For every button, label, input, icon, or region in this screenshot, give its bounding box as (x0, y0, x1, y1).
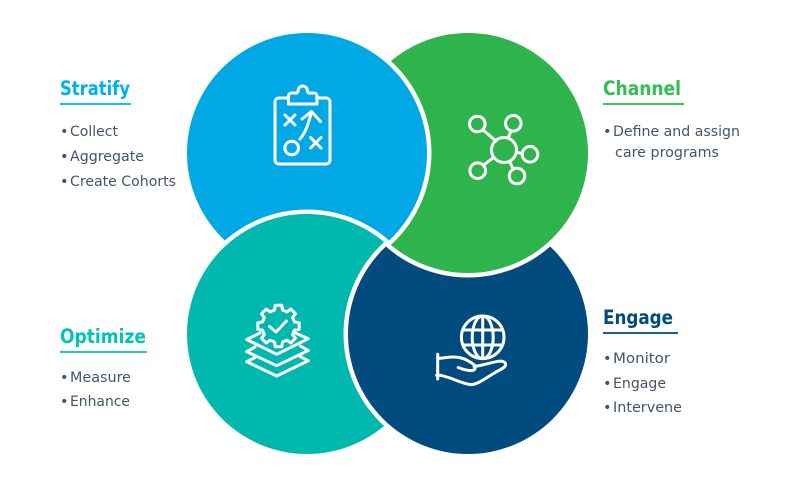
list: Stratify: • (60, 149, 69, 165)
panel: Engage (603, 306, 682, 416)
underline: Optimize (60, 351, 147, 353)
icon: network hub (470, 116, 538, 184)
list: Channel: • (603, 124, 612, 140)
list: Engage: • (603, 351, 612, 367)
list: Stratify: Collect (70, 124, 118, 140)
list: Stratify: Create Cohorts (70, 174, 176, 190)
heading: Optimize: Optimize (60, 325, 146, 348)
green circle (390, 33, 588, 273)
icon: gear and layers (247, 305, 308, 376)
heading: Channel: Channel (603, 77, 681, 100)
underline: Stratify (60, 103, 131, 105)
list: Engage: Intervene (613, 400, 682, 416)
list: Optimize: • (60, 394, 69, 410)
blue circle (187, 33, 427, 240)
panel: Stratify (60, 77, 176, 190)
underline: Channel (603, 103, 684, 105)
list: Engage: Monitor (613, 351, 670, 367)
icon: hand holding globe (437, 316, 506, 385)
icon: clipboard with play diagram (275, 86, 330, 164)
heading: Engage: Engage (603, 306, 673, 329)
list: Optimize: Enhance (70, 394, 130, 410)
panel: Optimize (60, 325, 147, 410)
navy circle (348, 246, 588, 454)
heading: Stratify: Stratify (60, 77, 130, 100)
list: Channel: Define and assign (613, 124, 740, 140)
list: Channel: care programs (615, 145, 719, 161)
teal circle (187, 214, 384, 454)
list: Optimize: • (60, 370, 69, 386)
list: Engage: • (603, 400, 612, 416)
list: Engage: • (603, 376, 612, 392)
list: Stratify: Aggregate (70, 149, 144, 165)
list: Stratify: • (60, 174, 69, 190)
list: Engage: Engage (613, 376, 666, 392)
panel: Channel (603, 77, 740, 161)
list: Stratify: • (60, 124, 69, 140)
list: Optimize: Measure (70, 370, 131, 386)
underline: Engage (603, 332, 678, 334)
